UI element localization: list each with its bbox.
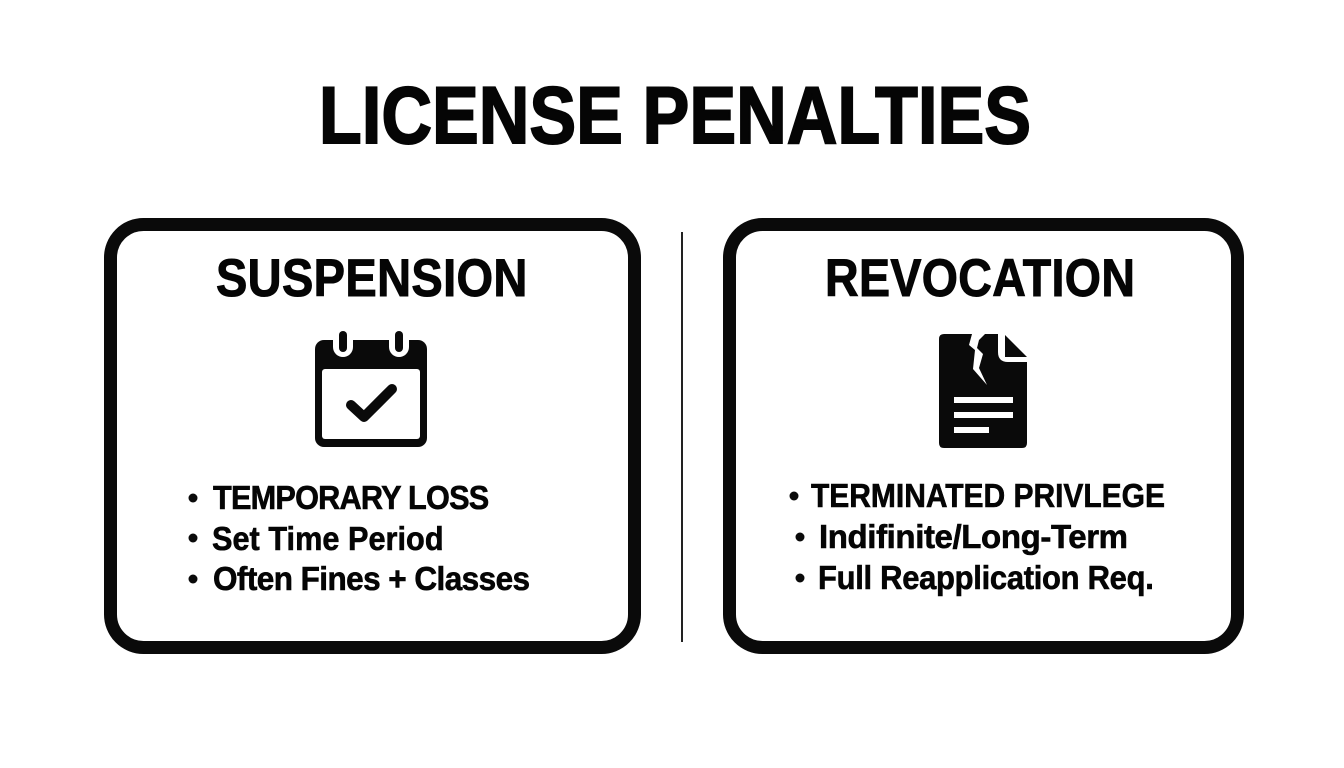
heading: suspension: SUSPENSION — [216, 248, 527, 308]
icon: calendar with check mark — [315, 326, 427, 447]
icon: torn document — [939, 334, 1027, 448]
list: suspension details: Set Time Period — [212, 520, 444, 557]
list: suspension details: Often Fines + Classes — [213, 560, 530, 597]
list: revocation details: TERMINATED PRIVLEGE — [811, 477, 1165, 514]
title: LICENSE PENALTIES — [319, 71, 1031, 161]
center divider — [681, 232, 683, 642]
list: suspension details: TEMPORARY LOSS — [213, 479, 489, 516]
panel: revocation — [730, 224, 1238, 648]
list: suspension details — [188, 479, 530, 597]
list: revocation details: Full Reapplication Req. — [818, 559, 1154, 596]
list: revocation details: Indifinite/Long-Term — [819, 518, 1128, 555]
heading: revocation: REVOCATION — [825, 248, 1135, 308]
list: revocation details — [790, 477, 1165, 596]
panel: suspension — [110, 224, 634, 648]
